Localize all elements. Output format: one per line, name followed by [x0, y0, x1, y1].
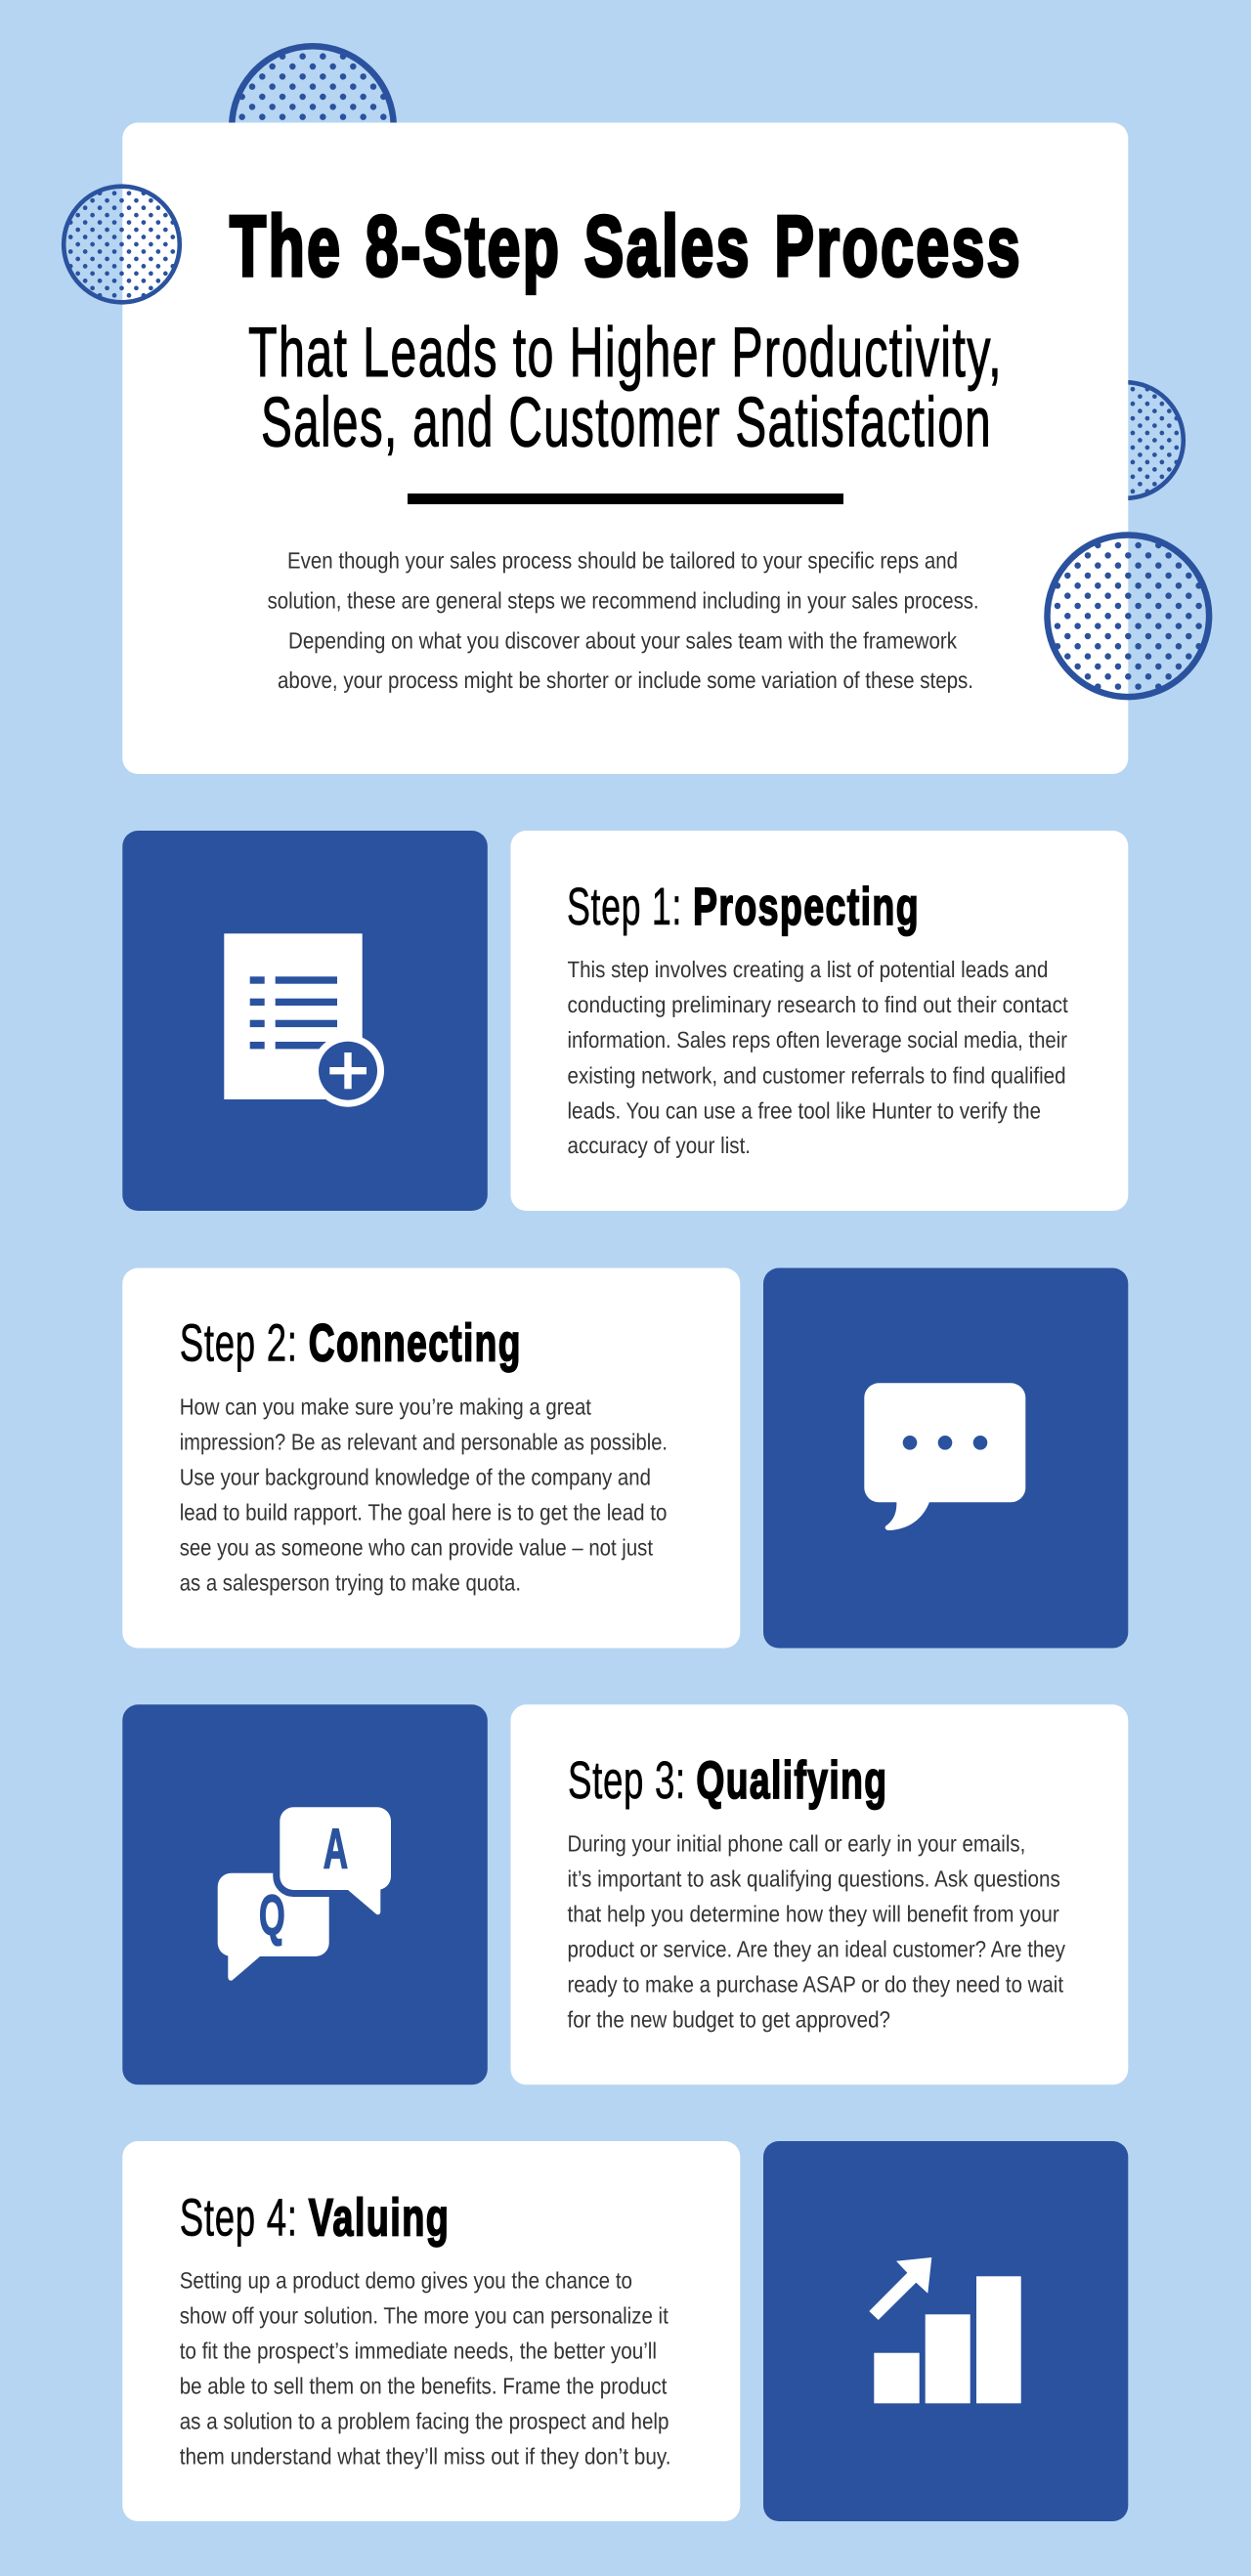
panel: step 3 text [510, 1704, 1128, 2084]
heading: step 2: Connecting [309, 1313, 522, 1372]
intro text: above, your process might be shorter or include some variation of these steps. [278, 667, 973, 693]
decorative dotted circle: right, over card [1048, 536, 1209, 697]
panel: step 4 icon [763, 2141, 1128, 2521]
body: step 1: conducting preliminary research to find out their contact [567, 992, 1068, 1017]
letter A: A [324, 1818, 348, 1881]
body: step 1 [567, 957, 1068, 1158]
intro text [268, 548, 979, 693]
heading: step 2: Step 2: [180, 1313, 298, 1372]
body: step 2 [180, 1394, 668, 1595]
title rule [408, 494, 843, 504]
body: step 2: impression? Be as relevant and personable as possible. [180, 1429, 668, 1454]
heading: step 3: Step 3: [568, 1751, 686, 1810]
body: step 1: accuracy of your list. [567, 1133, 751, 1158]
body: step 2: see you as someone who can provide value – not just [180, 1534, 653, 1560]
body: step 3: that help you determine how they will benefit from your [567, 1901, 1059, 1926]
body: step 1: existing network, and customer referrals to find qualified [567, 1062, 1066, 1088]
body: step 4: Setting up a product demo gives you the chance to [180, 2267, 632, 2293]
panel: step 2 text [122, 1268, 740, 1648]
body: step 4 [180, 2267, 670, 2469]
heading: step 4: Step 4: [180, 2188, 298, 2247]
body: step 1: leads. You can use a free tool like Hunter to verify the [567, 1097, 1041, 1123]
body: step 3: ready to make a purchase ASAP or do they need to wait [567, 1971, 1063, 1996]
body: step 3: product or service. Are they an ideal customer? Are they [567, 1936, 1065, 1961]
icon: document with plus [224, 933, 384, 1107]
letter Q: Q [259, 1883, 285, 1947]
body: step 4: to fit the prospect’s immediate needs, the better you’ll [180, 2338, 657, 2363]
heading: step 4: Valuing [309, 2188, 450, 2247]
heading: step 1: Prospecting [693, 878, 920, 936]
panel: step 2 icon [763, 1268, 1128, 1648]
body: step 1: information. Sales reps often leverage social media, their [567, 1027, 1067, 1052]
intro text: solution, these are general steps we recommend including in your sales process. [268, 587, 979, 613]
body: step 4: show off your solution. The more you can personalize it [180, 2302, 669, 2328]
panel: header [122, 123, 1128, 774]
body: step 3 [567, 1830, 1065, 2032]
subtitle [248, 314, 1003, 462]
heading: step 3 [568, 1751, 887, 1810]
heading: step 3: Qualifying [696, 1751, 887, 1810]
body: step 2: as a salesperson trying to make quota. [180, 1569, 521, 1595]
heading: step 1: Step 1: [567, 878, 682, 936]
body: step 4: them understand what they’ll miss out if they don’t buy. [180, 2443, 670, 2469]
body: step 3: it’s important to ask qualifying questions. Ask questions [567, 1866, 1060, 1891]
body: step 4: as a solution to a problem facing the prospect and help [180, 2408, 669, 2433]
heading: step 1 [567, 878, 920, 936]
decorative dotted circle: right, behind card [1067, 382, 1184, 498]
body: step 3: During your initial phone call or early in your emails, [567, 1830, 1025, 1856]
body: step 2: Use your background knowledge of the company and [180, 1464, 651, 1489]
decorative dotted circle: top [232, 46, 394, 208]
body: step 2: lead to build rapport. The goal here is to get the lead to [180, 1499, 667, 1524]
icon: question and answer bubbles [218, 1807, 391, 1981]
heading: step 4 [180, 2188, 450, 2247]
panel: step 1 icon [122, 831, 488, 1211]
icon: speech bubble [864, 1383, 1025, 1530]
body: step 1: This step involves creating a list of potential leads and [567, 957, 1048, 982]
panel: step 1 text [510, 831, 1128, 1211]
decorative dotted circle: left, over card [64, 187, 180, 302]
body: step 4: be able to sell them on the benefits. Frame the product [180, 2373, 668, 2398]
heading: step 2 [180, 1313, 522, 1372]
icon: rising bar chart with arrow [869, 2257, 1021, 2403]
intro text: Depending on what you discover about your sales team with the framework [288, 627, 957, 653]
body: step 2: How can you make sure you’re making a great [180, 1394, 591, 1419]
panel: step 4 text [122, 2141, 740, 2521]
intro text: Even though your sales process should be tailored to your specific reps and [287, 548, 958, 574]
body: step 3: for the new budget to get approved? [567, 2006, 890, 2032]
panel: step 3 icon [122, 1704, 488, 2084]
